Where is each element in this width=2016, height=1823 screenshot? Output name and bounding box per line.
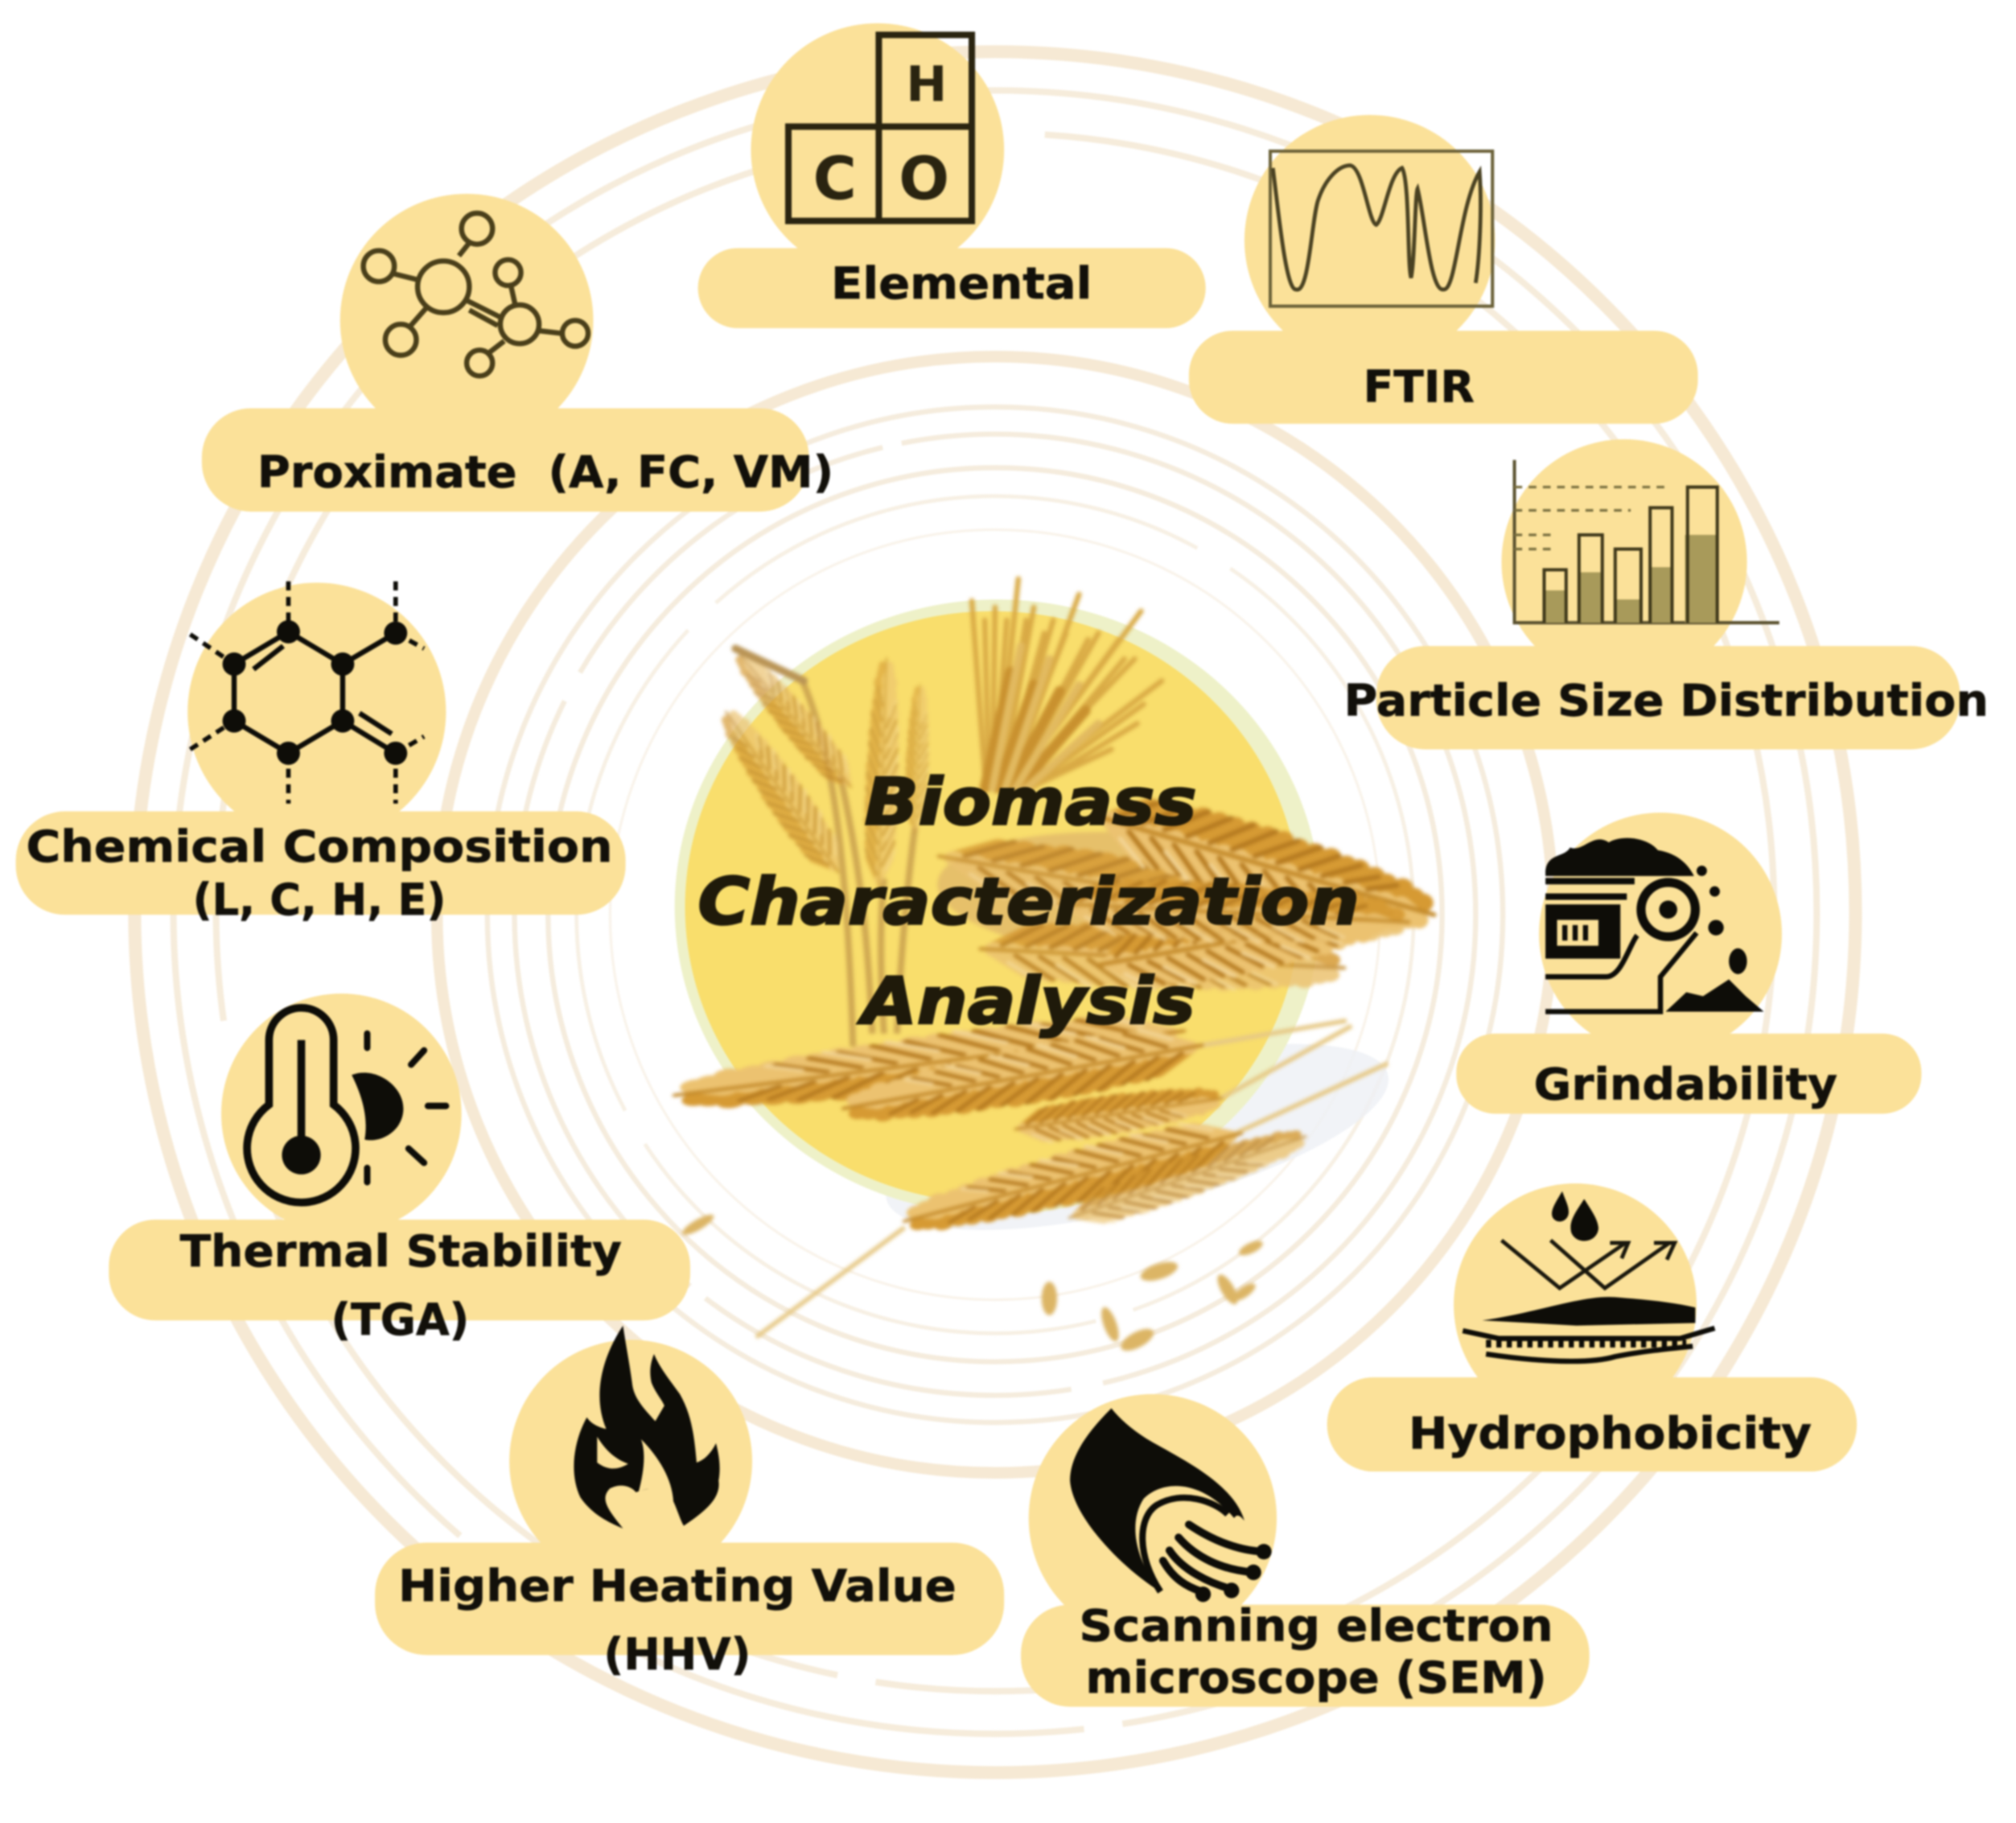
icon: hexagonal molecule (190, 582, 424, 804)
label: Elemental: Elemental (831, 257, 1092, 309)
label: Grindability: Grindability (1534, 1059, 1837, 1110)
panel: Scanning electron microscope (SEM) (1021, 1394, 1590, 1706)
label: Particle Size Distribution: Particle Size Distribution (1344, 675, 1989, 726)
label: Higher Heating Value (HHV) (398, 1560, 957, 1680)
label: Chemical Composition (L, C, H, E): Chemical Composition (26, 821, 613, 872)
wheat shadow (870, 1006, 1405, 1269)
icon: CHO element boxes: H (906, 56, 947, 113)
panel: FTIR (1189, 115, 1698, 424)
panel: Chemical Composition (L, C, H, E) (16, 582, 626, 925)
icon: molecule network (364, 213, 588, 376)
icon: thermometer and sun (247, 1008, 446, 1203)
label: Thermal Stability (TGA): Thermal Stability (180, 1225, 622, 1277)
lower ear stems (756, 1021, 1388, 1337)
icon: flame (574, 1326, 720, 1529)
central yellow disc (675, 599, 1321, 1215)
left ears and stems (711, 642, 932, 1047)
panel: Higher Heating Value (HHV) (375, 1326, 1004, 1680)
golden ears (935, 827, 1368, 961)
panel: Particle Size Distribution (1344, 439, 1989, 749)
icon: CHO element boxes: O (899, 144, 949, 213)
panel: Hydrophobicity (1327, 1183, 1857, 1471)
title: Biomass Characterization Analysis: Analysis (857, 963, 1195, 1039)
icon: fiber bundle (1070, 1408, 1272, 1602)
title: Biomass Characterization Analysis (698, 764, 1360, 1039)
panel: Elemental (698, 23, 1206, 328)
label: Scanning electron microscope (SEM): Scanning electron (1079, 1600, 1553, 1652)
label: Chemical Composition (L, C, H, E) (26, 821, 613, 925)
loose grains (680, 1212, 1265, 1355)
icon: bar chart (1515, 460, 1779, 623)
title: Biomass Characterization Analysis: Characterization (698, 863, 1360, 939)
label: FTIR: FTIR (1364, 360, 1475, 412)
panel: Thermal Stability (TGA) (109, 994, 690, 1345)
icon: grinder (1545, 838, 1763, 1011)
icon: CHO element boxes: C (813, 144, 857, 213)
label: Hydrophobicity: Hydrophobicity (1409, 1407, 1812, 1459)
label: Thermal Stability (TGA) (180, 1225, 622, 1345)
label: Scanning electron microscope (SEM) (1079, 1600, 1553, 1703)
title: Biomass Characterization Analysis: Biomass (865, 764, 1196, 840)
label: Higher Heating Value (HHV): (HHV) (603, 1628, 751, 1680)
label: Chemical Composition (L, C, H, E): (L, C, H, E) (193, 874, 446, 925)
icon: CHO element boxes (788, 35, 972, 221)
label: Scanning electron microscope (SEM): microscope (SEM) (1085, 1652, 1547, 1703)
panel: Proximate (A, FC, VM) (202, 194, 833, 512)
label: Higher Heating Value (HHV): Higher Heating Value (398, 1560, 957, 1611)
icon: water repellent layer (1463, 1191, 1714, 1361)
golden mass underlay (933, 819, 1368, 977)
wheat illustration (673, 578, 1444, 1355)
bearded ear awns (972, 578, 1162, 791)
label: Thermal Stability (TGA): (TGA) (331, 1294, 469, 1345)
panel: Grindability (1456, 813, 1921, 1113)
icon: FTIR spectrum (1270, 151, 1492, 307)
label: Proximate (A, FC, VM): Proximate (A, FC, VM) (257, 446, 833, 497)
